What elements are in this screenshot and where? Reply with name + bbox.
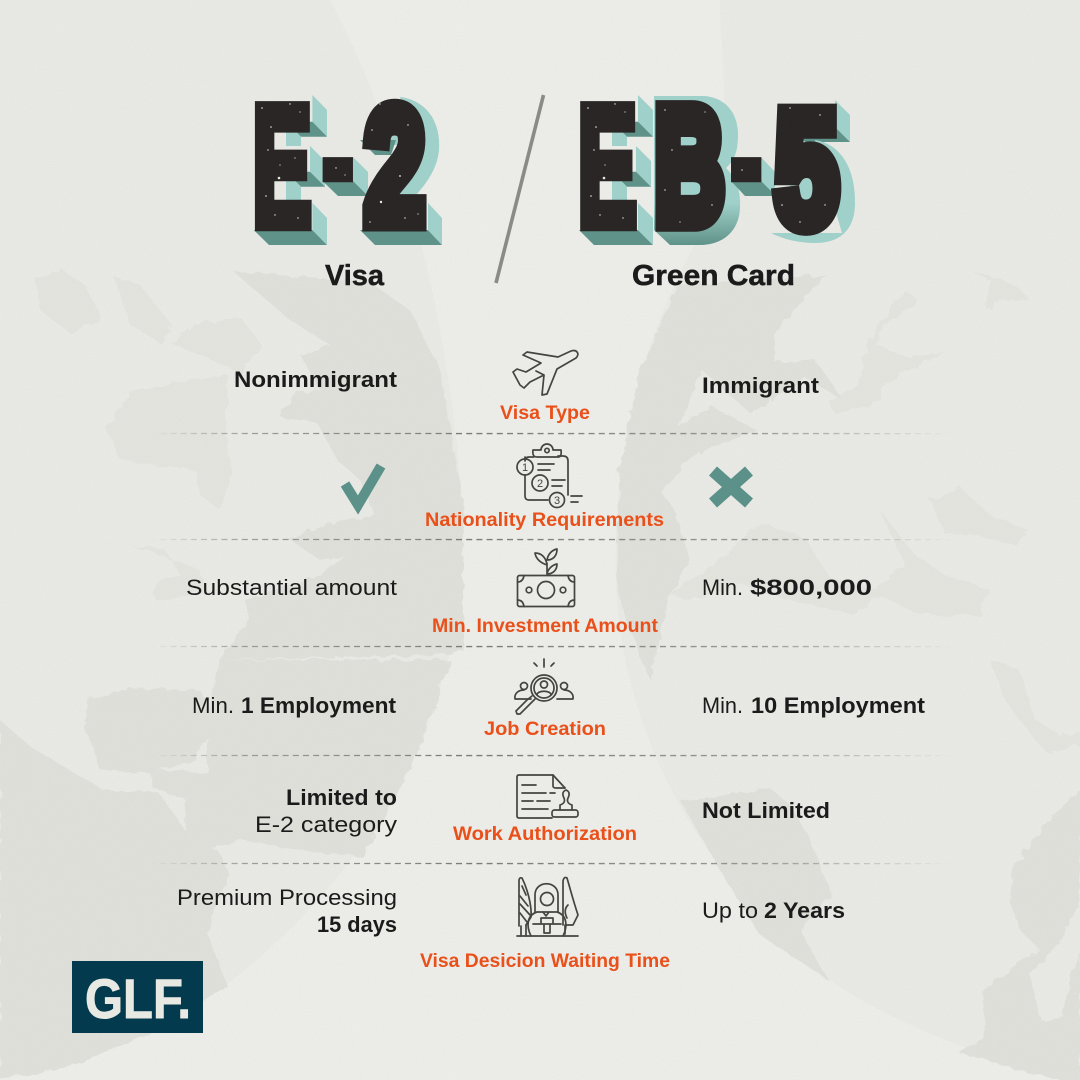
speckles	[261, 103, 419, 223]
E-2 value: Min.	[192, 693, 234, 718]
icon: numbered clipboard: 2	[537, 478, 543, 490]
lettering: EB-5: 5	[775, 78, 838, 260]
lettering: EB-5: -	[728, 61, 764, 251]
logo: GLF: GLF.	[85, 967, 191, 1030]
icon: document with stamp	[517, 775, 578, 818]
EB-5 value: Not Limited	[702, 798, 830, 823]
subtitle: Visa: Visa	[325, 260, 385, 292]
EB-5 value: Up to	[702, 898, 758, 923]
EB-5 value: $800,000	[750, 575, 872, 600]
E-2 value	[177, 885, 397, 937]
lettering: EB-5: E	[578, 70, 637, 261]
E-2 value: 15 days	[317, 912, 397, 937]
icon: official between flags	[517, 877, 578, 936]
row: Min. Investment Amount	[186, 549, 872, 637]
row: Nationality Requirements	[345, 444, 749, 531]
label: Work Authorization	[453, 824, 637, 845]
row: Job Creation	[192, 659, 926, 740]
extrusion: E-2	[254, 95, 442, 245]
icon: magnifier over people	[515, 659, 573, 714]
E-2 value: Substantial amount	[186, 575, 397, 600]
EB-5 value: Min.	[702, 575, 743, 600]
left globe	[0, 0, 463, 1078]
lettering: E-2: -	[320, 61, 356, 251]
icon: numbered clipboard	[517, 444, 582, 508]
row: Work Authorization	[255, 775, 830, 845]
lettering: E-2: E	[252, 70, 312, 261]
title: E-2	[252, 61, 442, 261]
right globe	[616, 0, 1080, 1080]
E-2 value: Limited to	[286, 785, 397, 810]
label: Visa Type	[500, 403, 590, 424]
E-2 value: Premium Processing	[177, 885, 397, 910]
icon: money with plant	[518, 549, 574, 606]
icon: airplane	[513, 351, 578, 395]
EB-5 value: 10 Employment	[751, 693, 926, 718]
lettering: EB-5	[578, 61, 838, 261]
label: Job Creation	[484, 719, 606, 740]
EB-5 value: Immigrant	[702, 373, 820, 398]
cross mark	[713, 471, 749, 503]
E-2 value: Nonimmigrant	[234, 367, 398, 392]
check mark	[345, 466, 381, 505]
lettering: E-2: 2	[365, 76, 425, 257]
icon: numbered clipboard: 1	[522, 462, 528, 474]
EB-5 value: Min.	[702, 693, 743, 718]
speckles	[587, 103, 826, 223]
EB-5 value: 2 Years	[764, 898, 845, 923]
extrusion: EB-5	[579, 95, 855, 245]
subtitle: Green Card: Green Card	[632, 260, 795, 292]
label: Nationality Requirements	[425, 510, 664, 531]
title: EB-5	[578, 61, 855, 261]
row: Visa Type	[234, 351, 820, 424]
row: Visa Decision Waiting Time	[177, 877, 845, 972]
E-2 value: 1 Employment	[241, 693, 397, 718]
icon: numbered clipboard: 3	[554, 495, 560, 507]
E-2 value	[255, 785, 397, 837]
E-2 value: E-2 category	[255, 812, 397, 837]
lettering: EB-5: B	[655, 76, 724, 257]
label: Visa Desicion Waiting Time	[420, 951, 670, 972]
slash divider	[496, 95, 544, 283]
label: Min. Investment Amount	[432, 616, 659, 637]
lettering: E-2	[252, 61, 425, 261]
